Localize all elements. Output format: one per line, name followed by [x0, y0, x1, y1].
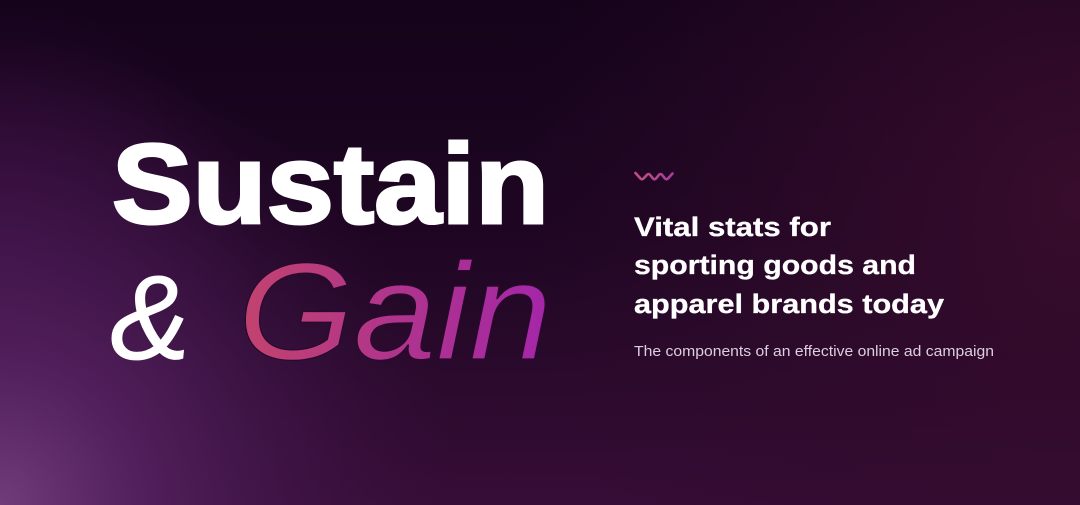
title: ampersand: &: [110, 251, 190, 385]
subheading: apparel brands today: [634, 289, 944, 319]
description: The components of an effective online ad campaign: [634, 344, 994, 360]
title: Gain: Gain: [238, 235, 552, 389]
subheading: [634, 212, 944, 319]
title: Sustain: Sustain: [112, 121, 549, 247]
icon: squiggle: [636, 173, 672, 179]
subheading: sporting goods and: [634, 250, 916, 280]
subheading: Vital stats for: [634, 212, 832, 242]
